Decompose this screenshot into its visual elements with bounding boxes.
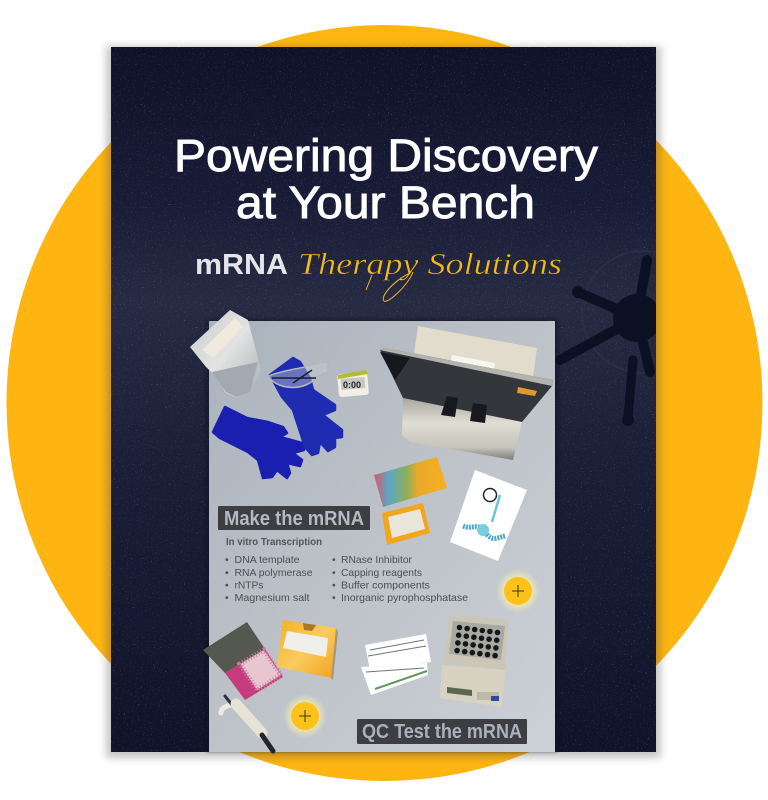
icon: upper glove — [270, 358, 342, 455]
text: ingredient list right: • — [332, 554, 336, 566]
icon: protocol notebook — [450, 470, 527, 561]
text: ingredient list right: • — [332, 567, 336, 579]
text: ingredient list right — [332, 554, 468, 604]
icon: pink tube rack — [203, 622, 283, 700]
text: ingredient list right: Inorganic pyrophosphatase — [341, 592, 468, 604]
icon: lower glove — [213, 407, 304, 478]
text: ingredient list left: Magnesium salt — [234, 592, 310, 604]
subtitle: mRNA — [195, 249, 288, 281]
label: make the mRNA: Make the mRNA — [224, 508, 364, 530]
icon: plus button left — [283, 694, 327, 738]
icon: pipette — [221, 696, 273, 751]
icon: yellow kit box — [277, 620, 338, 680]
text: ingredient list left: • — [225, 554, 229, 566]
subtitle — [195, 246, 562, 301]
text: in vitro transcription heading: In vitro Transcription — [226, 536, 322, 548]
title: Powering Discovery — [174, 130, 598, 181]
text: ingredient list right: Buffer components — [341, 580, 430, 592]
icon: mRNA product card — [374, 457, 447, 507]
text: ingredient list left: DNA template — [234, 554, 300, 566]
label: QC test the mRNA: QC Test the mRNA — [362, 721, 522, 743]
text: ingredient list right: RNase Inhibitor — [341, 554, 412, 566]
title: at Your Bench — [236, 177, 535, 228]
text: ingredient list left: rNTPs — [234, 580, 264, 592]
poster — [106, 46, 704, 758]
icon: digital timer — [337, 370, 369, 397]
icon: plus button right — [496, 569, 540, 613]
text: ingredient list right: • — [332, 592, 336, 604]
text: ingredient list right: Capping reagents — [341, 567, 422, 579]
icon: safety goggles — [269, 362, 328, 388]
stool silhouette — [555, 250, 656, 426]
icon: dry heat block — [440, 615, 508, 707]
text: ingredient list right: • — [332, 580, 336, 592]
text: ingredient list left — [225, 554, 313, 604]
icon: digital timer: 0:00 — [343, 380, 361, 390]
subtitle: Therapy Solutions — [298, 246, 562, 281]
icon: thermal cycler — [380, 326, 553, 460]
text: ingredient list left: • — [225, 580, 229, 592]
title — [174, 130, 598, 228]
text: ingredient list left: • — [225, 592, 229, 604]
icon: orange kit box — [382, 503, 430, 545]
text: ingredient list left: • — [225, 567, 229, 579]
text: ingredient list left: RNA polymerase — [234, 567, 313, 579]
bench surface — [190, 310, 558, 752]
icon: ice bucket in plastic bag — [190, 310, 261, 398]
icon: gel result sheets — [361, 634, 431, 695]
